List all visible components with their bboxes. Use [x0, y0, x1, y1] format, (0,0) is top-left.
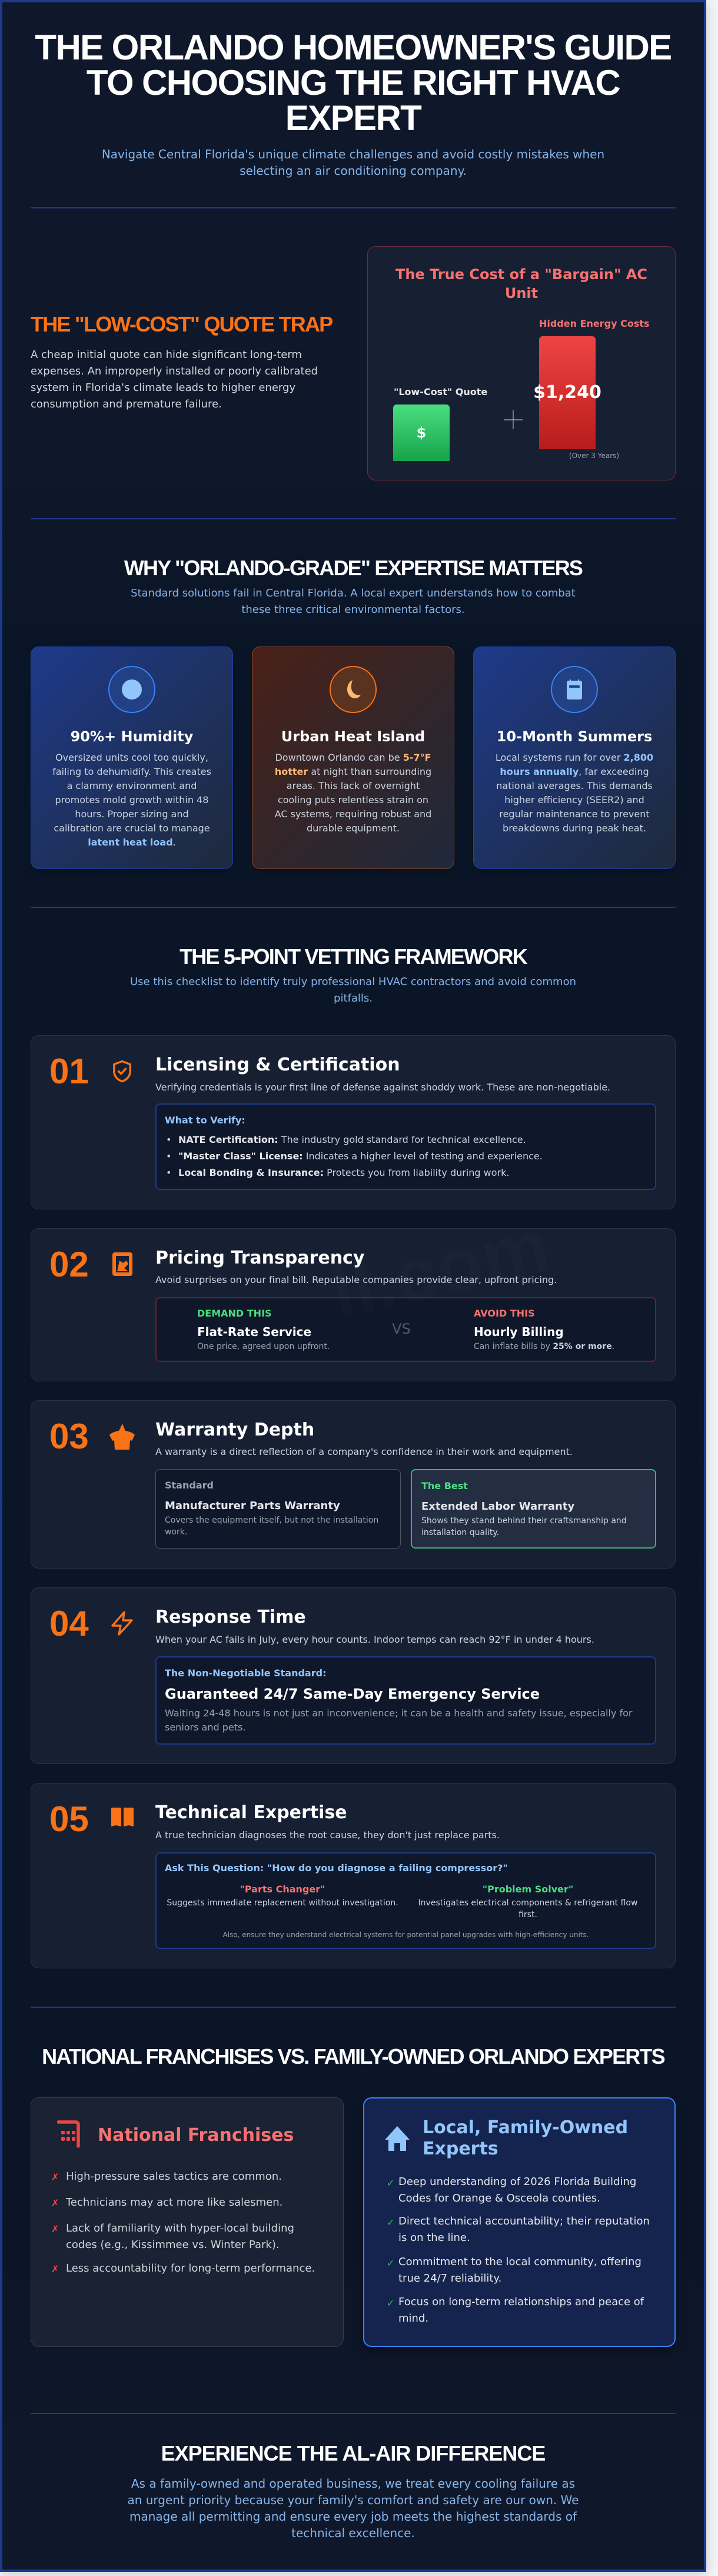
box: standard warranty: Manufacturer Parts Warranty: [165, 1500, 340, 1512]
chart title: The True Cost of a "Bargain" AC: [395, 266, 647, 283]
verify list: Local Bonding & Insurance: Protects you from liability during work.: [178, 1167, 509, 1178]
card text: durable equipment.: [307, 823, 400, 834]
drawback list: [51, 2170, 315, 2275]
main title: [35, 28, 672, 138]
card text: [496, 752, 653, 834]
icon: shield check: [113, 1060, 131, 1082]
drawback list: ✗: [51, 2197, 59, 2209]
icon: building: [57, 2120, 80, 2148]
card text: [274, 752, 431, 834]
label: hidden energy costs: Hidden Energy Costs: [539, 318, 650, 329]
drawback list: codes (e.g., Kissimmee vs. Winter Park).: [66, 2239, 280, 2251]
step title: Technical Expertise: [155, 1802, 347, 1823]
card text: hours annually, far exceeding: [500, 766, 649, 777]
card title: 90%+ Humidity: [71, 728, 193, 745]
box: diagnostic question: [155, 1852, 656, 1949]
card text: latent heat load.: [88, 837, 176, 848]
card text: failing to dehumidify. This creates: [52, 766, 211, 777]
icon: humidity: [108, 666, 155, 713]
card title: 10-Month Summers: [497, 728, 652, 745]
watermark: ll.com: [323, 1202, 557, 1335]
step 01: licensing: [31, 1035, 676, 1209]
step 02: pricing: [31, 1228, 676, 1381]
benefit list: ✓: [387, 2217, 394, 2228]
chart title: Unit: [505, 285, 538, 301]
panel: true cost chart: [367, 246, 676, 480]
section heading: franchises vs family-owned: NATIONAL FRANCHISES VS. FAMILY-OWNED ORLANDO EXPERTS: [42, 2044, 664, 2068]
main title: THE ORLANDO HOMEOWNER'S GUIDE: [35, 28, 672, 67]
card text: hours. Proper sizing and: [75, 808, 189, 820]
problem solver column: "Problem Solver": [483, 1884, 573, 1895]
card text: hotter at night than surrounding: [275, 766, 431, 777]
box: standard warranty: Covers the equipment itself, but not the installation: [165, 1516, 378, 1525]
trap description: system in Florida's climate leads to higher energy: [31, 382, 295, 394]
step 03: warranty: [31, 1400, 676, 1569]
benefit list: Focus on long-term relationships and peace of: [398, 2296, 644, 2308]
section heading: al-air difference: EXPERIENCE THE AL-AIR DIFFERENCE: [161, 2441, 545, 2465]
demand column: [197, 1308, 330, 1351]
card text: Oversized units cool too quickly,: [55, 752, 208, 763]
card text: Downtown Orlando can be 5-7°F: [275, 752, 431, 763]
benefit list: mind.: [398, 2312, 428, 2325]
trap description: consumption and premature failure.: [31, 398, 222, 410]
demand column: Flat-Rate Service: [197, 1325, 311, 1339]
card: 10-month summers: [473, 647, 676, 869]
step description: A warranty is a direct reflection of a company's confidence in their work and equipment.: [155, 1446, 573, 1457]
section heading: low-cost quote trap: THE "LOW-COST" QUOTE TRAP: [31, 312, 332, 336]
step description: When your AC fails in July, every hour counts. Indoor temps can reach 92°F in under 4 hours.: [155, 1634, 594, 1645]
avoid column: [474, 1308, 614, 1351]
plus sign: [504, 410, 523, 429]
problem solver column: Investigates electrical components & refrigerant flow: [418, 1898, 637, 1908]
verify list: •: [166, 1167, 171, 1178]
step 05: technical expertise: [31, 1783, 676, 1968]
box: best warranty: installation quality.: [421, 1528, 499, 1537]
benefit list: [387, 2176, 650, 2325]
benefit list: Direct technical accountability; their reputation: [398, 2215, 650, 2227]
parts changer column: [167, 1884, 398, 1908]
card text: regular maintenance to prevent: [499, 808, 650, 820]
box: best warranty: [411, 1469, 656, 1549]
card text: cooling puts relentless strain on: [278, 794, 428, 805]
benefit list: ✓: [387, 2257, 394, 2269]
card text: a clammy environment and: [67, 780, 197, 791]
value: $1,240: $1,240: [533, 382, 601, 403]
drawback list: Technicians may act more like salesmen.: [66, 2196, 282, 2209]
card text: calibration are crucial to manage: [54, 823, 210, 834]
card text: higher efficiency (SEER2) and: [504, 794, 644, 805]
icon: pricing tag: [112, 1252, 132, 1276]
verify list: •: [166, 1151, 171, 1162]
step number: 03: [49, 1417, 89, 1456]
footnote: Also, ensure they understand electrical systems for potential panel upgrades with high-efficiency units.: [222, 1931, 589, 1939]
problem solver column: [418, 1884, 637, 1919]
box: non-negotiable standard: The Non-Negotiable Standard:: [165, 1667, 326, 1679]
verify list: •: [166, 1134, 171, 1145]
section intro: [130, 976, 576, 1004]
box: standard warranty: Standard: [165, 1480, 214, 1491]
icon: calendar: [551, 666, 598, 713]
icon: warranty badge: [109, 1424, 135, 1450]
box: best warranty: Extended Labor Warranty: [421, 1500, 574, 1513]
red bar: [539, 336, 596, 449]
step number: 05: [49, 1799, 89, 1839]
step description: A true technician diagnoses the root cause, they don't just replace parts.: [155, 1829, 500, 1841]
subtitle: selecting an air conditioning company.: [240, 164, 467, 178]
card text: [52, 752, 211, 848]
card text: AC systems, requiring robust and: [275, 808, 431, 820]
box: standard warranty: [155, 1469, 401, 1549]
dollar sign: $: [417, 425, 426, 441]
icon: book: [111, 1808, 134, 1826]
problem solver column: first.: [518, 1910, 537, 1919]
drawback list: ✗: [51, 2263, 59, 2275]
icon: lightning bolt: [111, 1611, 133, 1636]
avoid column: AVOID THIS: [474, 1308, 535, 1319]
box: standard warranty: work.: [165, 1527, 187, 1537]
step description: Verifying credentials is your first line of defense against shoddy work. These are non-negotiable.: [155, 1082, 610, 1093]
avoid column: Can inflate bills by 25% or more.: [474, 1342, 614, 1351]
box: non-negotiable standard: Waiting 24-48 hours is not just an inconvenience; it can be a health and safety issue, especially for: [165, 1708, 632, 1719]
parts changer column: Suggests immediate replacement without investigation.: [167, 1898, 398, 1908]
drawback list: ✗: [51, 2171, 59, 2183]
section intro: pitfalls.: [334, 992, 373, 1004]
panel title: Local, Family-Owned: [423, 2117, 628, 2138]
verify list: [166, 1134, 543, 1178]
demand column: DEMAND THIS: [197, 1308, 272, 1319]
card text: promotes mold growth within 48: [55, 794, 208, 805]
closing paragraph: technical excellence.: [291, 2526, 415, 2540]
step title: Licensing & Certification: [155, 1055, 400, 1075]
box: non-negotiable standard: [155, 1656, 656, 1745]
panel: local family-owned experts: [363, 2097, 676, 2347]
question: Ask This Question: "How do you diagnose a failing compressor?": [165, 1862, 508, 1874]
benefit list: is on the line.: [398, 2232, 470, 2244]
benefit list: Deep understanding of 2026 Florida Building: [398, 2176, 636, 2188]
avoid column: Hourly Billing: [474, 1325, 564, 1339]
step title: Response Time: [155, 1607, 306, 1627]
step description: Avoid surprises on your final bill. Reputable companies provide clear, upfront pricing.: [155, 1274, 557, 1285]
card text: national averages. This demands: [496, 780, 653, 791]
trap description: A cheap initial quote can hide significant long-term: [31, 349, 302, 361]
step number: 04: [49, 1604, 89, 1643]
drawback list: High-pressure sales tactics are common.: [66, 2170, 282, 2183]
box: best warranty: Shows they stand behind their craftsmanship and: [421, 1516, 627, 1526]
chart title: [395, 266, 647, 301]
card: humidity: [31, 647, 233, 869]
card title: Urban Heat Island: [281, 728, 425, 745]
section intro: [131, 587, 576, 616]
subtitle: Navigate Central Florida's unique climate challenges and avoid costly mistakes when: [102, 147, 604, 161]
green bar: [393, 405, 450, 461]
icon: moon: [330, 666, 377, 713]
panel title: Experts: [423, 2139, 498, 2159]
closing paragraph: an urgent priority because your family's comfort and safety are our own. We: [127, 2493, 579, 2507]
step number: 01: [49, 1052, 89, 1091]
parts changer column: "Parts Changer": [240, 1884, 325, 1895]
step title: Warranty Depth: [155, 1420, 314, 1440]
closing paragraph: As a family-owned and operated business, we treat every cooling failure as: [131, 2476, 575, 2491]
verify list: "Master Class" License: Indicates a higher level of testing and experience.: [178, 1151, 543, 1162]
benefit list: Commitment to the local community, offering: [398, 2256, 641, 2268]
box: non-negotiable standard: Guaranteed 24/7 Same-Day Emergency Service: [165, 1686, 540, 1702]
step title: Pricing Transparency: [155, 1248, 364, 1268]
drawback list: Lack of familiarity with hyper-local building: [66, 2222, 294, 2234]
vs label: VS: [392, 1321, 411, 1337]
panel title: National Franchises: [98, 2125, 294, 2146]
section heading: vetting framework: THE 5-POINT VETTING FRAMEWORK: [180, 944, 527, 969]
benefit list: ✓: [387, 2177, 394, 2189]
box: best warranty: The Best: [421, 1480, 468, 1491]
card: urban heat island: [252, 647, 454, 869]
subtitle: [102, 147, 604, 178]
section intro: Standard solutions fail in Central Florida. A local expert understands how to combat: [131, 587, 576, 599]
box heading: What to Verify:: [165, 1115, 245, 1126]
benefit list: true 24/7 reliability.: [398, 2272, 501, 2285]
step number: 02: [49, 1245, 89, 1284]
card text: Local systems run for over 2,800: [496, 752, 653, 763]
closing paragraph: manage all permitting and ensure every job meets the highest standards of: [129, 2509, 577, 2524]
drawback list: ✗: [51, 2223, 59, 2234]
icon: house: [385, 2126, 410, 2151]
trap description: expenses. An improperly installed or poorly calibrated: [31, 365, 318, 377]
section intro: Use this checklist to identify truly professional HVAC contractors and avoid common: [130, 976, 576, 988]
box: non-negotiable standard: seniors and pets.: [165, 1722, 245, 1733]
box: demand vs avoid: [155, 1297, 656, 1362]
box: what to verify: [155, 1103, 656, 1190]
trap description: [31, 349, 318, 410]
verify list: NATE Certification: The industry gold standard for technical excellence.: [178, 1134, 526, 1145]
step 04: response time: [31, 1587, 676, 1764]
section intro: these three critical environmental factors.: [241, 604, 465, 616]
demand column: One price, agreed upon upfront.: [197, 1342, 330, 1351]
label: low-cost quote: "Low-Cost" Quote: [394, 386, 487, 397]
drawback list: Less accountability for long-term performance.: [66, 2262, 315, 2275]
card text: breakdowns during peak heat.: [503, 823, 646, 834]
benefit list: Codes for Orange & Osceola counties.: [398, 2192, 600, 2204]
main title: EXPERT: [285, 98, 421, 138]
note: over 3 years: (Over 3 Years): [569, 452, 619, 460]
closing paragraph: [127, 2476, 579, 2540]
main title: TO CHOOSING THE RIGHT HVAC: [87, 63, 620, 102]
benefit list: ✓: [387, 2297, 394, 2309]
card text: areas. This lack of overnight: [287, 780, 420, 791]
panel: national franchises: [31, 2097, 344, 2347]
panel title: [423, 2117, 628, 2159]
section heading: orlando-grade expertise: WHY "ORLANDO-GRADE" EXPERTISE MATTERS: [124, 556, 582, 580]
